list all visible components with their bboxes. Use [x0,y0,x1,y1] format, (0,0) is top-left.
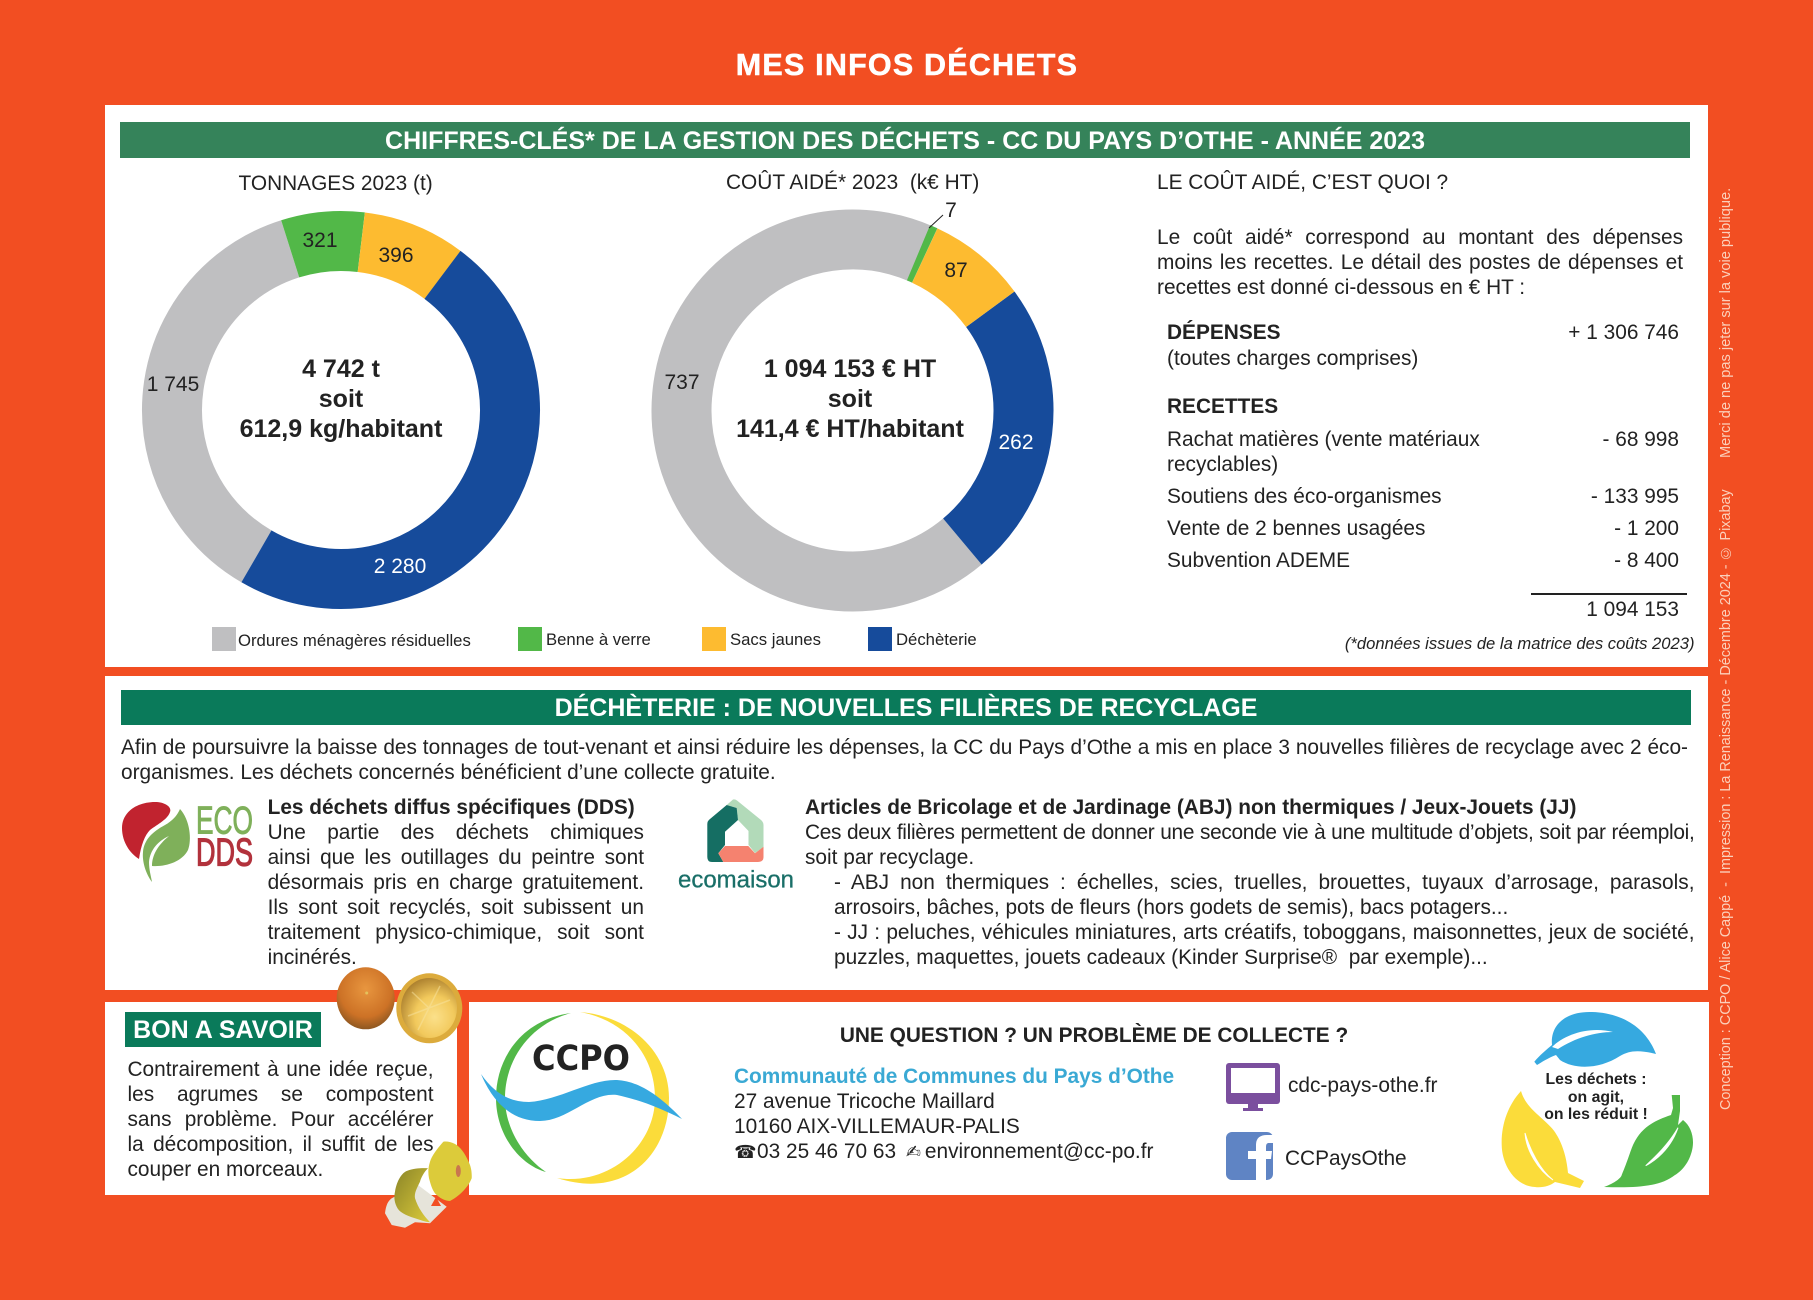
text: coordonnées: Communauté de Communes du Pays d’Othe [734,1065,1174,1088]
text: les déchets on agit: on les réduit ! [1544,1106,1648,1123]
chart title: tonnages: TONNAGES 2023 (t) [238,172,433,195]
text: explication du coût aidé: Le coût aidé* correspond au montant des dépenses [1157,226,1683,248]
donut center text: coût aidé: 141,4 € HT/habitant [736,415,964,443]
heading: déchèterie [121,690,1691,725]
icon: ordinateur [1226,1063,1280,1111]
text: site web: cdc-pays-othe.fr [1288,1074,1437,1096]
panel: contact [469,1002,1709,1195]
text: les déchets on agit [1544,1071,1648,1123]
donut chart: tonnages: 1 745 [147,373,199,396]
text: déchets diffus spécifiques: Une partie des déchets chimiques [268,820,644,844]
text: déchets diffus spécifiques: ainsi que les outillages du peintre sont [268,846,644,868]
text: explication du coût aidé: moins les recettes. Le détail des postes de dépenses et [1157,250,1683,274]
icon: facebook [1226,1132,1273,1180]
legend item: déchèterie: Déchèterie [896,630,977,649]
text: coordonnées: ☎ [734,1142,757,1163]
text: introduction: organismes. Les déchets concernés bénéficient d’une collecte gratuite. [121,760,776,784]
text: articles de bricolage et jeux-jouets: - ABJ non thermiques : échelles, scies, truelles, brouettes, tuyaux d’arrosage, parasols, [834,871,1694,894]
side credits: conception: Conception : CCPO / Alice Cappé - Impression : La Renaissance - Décembre 2024 - © Pixabay [1718,489,1734,1110]
logo: ecomaison [678,799,794,894]
text: agrumes: Contrairement à une idée reçue, [128,1058,434,1081]
text: agrumes: couper en morceaux. [128,1158,323,1181]
donut chart: coût aidé: 87 [944,259,968,282]
heading: question: UNE QUESTION ? UN PROBLÈME DE COLLECTE ? [840,1024,1348,1047]
logo: CCPO: CCPO [532,1039,630,1079]
footnote: (*données issues de la matrice des coûts 2023) [1345,634,1694,653]
panel: chiffres-clés [105,105,1708,667]
text: articles de bricolage et jeux-jouets: soit par recyclage. [805,846,974,869]
donut chart: tonnages: 2 280 [374,555,426,578]
legend item: ordures ménagères résiduelles: Ordures ménagères résiduelles [238,631,471,650]
logo: ecoDDS: ECO [196,799,253,842]
legend item: benne à verre: Benne à verre [546,630,651,649]
logo: ecomaison: ecomaison [678,866,794,894]
text: explication du coût aidé: recettes est donné ci-dessous en € HT : [1157,276,1525,298]
table: dépenses et recettes: Rachat matières (vente matériaux [1167,428,1480,450]
text: agrumes [128,1058,434,1181]
text: explication du coût aidé [1157,226,1683,298]
heading: déchèterie: DÉCHÈTERIE : DE NOUVELLES FILIÈRES DE RECYCLAGE [555,694,1257,722]
table: dépenses et recettes: - 68 998 [1602,428,1679,450]
text: les déchets on agit: on agit, [1568,1088,1624,1106]
text: articles de bricolage et jeux-jouets: arrosoirs, bâches, pots de fleurs (hors godets de semis), bacs potagers... [834,896,1508,919]
legend [212,627,977,651]
text: articles de bricolage et jeux-jouets: Ces deux filières permettent de donner une seconde vie à une multitude d’objets, soit par réemploi, [805,821,1694,844]
donut chart: tonnages [142,211,540,609]
panel: déchèterie [105,676,1708,990]
heading: chiffres-clés [120,122,1690,158]
icon: feuilles recyclage [1502,1012,1693,1188]
table: dépenses et recettes: - 8 400 [1614,548,1679,572]
donut center text: coût aidé [736,355,964,443]
text: articles de bricolage et jeux-jouets: puzzles, maquettes, jouets cadeaux (Kinder Surprise® par exemple)... [834,946,1488,969]
text: déchets diffus spécifiques: traitement physico-chimique, soit sont [268,920,644,944]
table: dépenses et recettes: Soutiens des éco-organismes [1167,484,1442,508]
text: articles de bricolage et jeux-jouets: Articles de Bricolage et de Jardinage (ABJ) non thermiques / Jeux-Jouets (JJ) [805,796,1576,819]
table: dépenses et recettes: Subvention ADEME [1167,548,1350,572]
illustration: zeste de citron [385,1142,472,1228]
panel: bon à savoir [105,1002,457,1195]
donut chart: coût aidé: 737 [664,371,700,394]
text: articles de bricolage et jeux-jouets: - JJ : peluches, véhicules miniatures, arts créatifs, toboggans, maisonnettes, jeux de société, [834,921,1694,944]
text: coordonnées: 03 25 46 70 63 environnement@cc-po.fr [757,1140,1153,1163]
logo: ecoDDS [122,799,253,882]
donut center text: coût aidé: soit [828,385,872,413]
text: coordonnées: ✍ [906,1142,921,1163]
text: déchets diffus spécifiques: Les déchets diffus spécifiques (DDS) [268,796,635,818]
table: dépenses et recettes: 1 094 153 [1586,598,1679,620]
legend item: sacs jaunes [702,627,821,651]
donut chart: coût aidé: 7 [945,199,957,222]
donut chart: tonnages: 321 [302,229,338,252]
text: articles de bricolage et jeux-jouets [805,796,1694,969]
text: coordonnées [734,1065,1174,1163]
chart title: coût aidé: COÛT AIDÉ* 2023 (k€ HT) [726,171,979,194]
text: les déchets on agit: Les déchets : [1546,1071,1646,1088]
text: agrumes: sans problème. Pour accélérer [128,1108,434,1131]
donut center text: tonnages: 612,9 kg/habitant [240,415,442,443]
legend item: benne à verre [518,627,651,651]
text: coordonnées: 10160 AIX-VILLEMAUR-PALIS [734,1115,1020,1138]
illustration: oranges [336,967,462,1044]
text: déchets diffus spécifiques [268,796,644,968]
text: déchets diffus spécifiques: désormais pris en charge gratuitement. [268,870,644,894]
heading: bon à savoir: BON A SAVOIR [133,1016,313,1044]
legend item: déchèterie [868,627,977,651]
text: coordonnées: 27 avenue Tricoche Maillard [734,1090,995,1113]
donut chart: coût aidé: 262 [998,431,1034,454]
text: facebook: CCPaysOthe [1285,1146,1407,1170]
heading: le coût aidé: LE COÛT AIDÉ, C’EST QUOI ? [1157,171,1448,194]
text: déchets diffus spécifiques: incinérés. [268,946,357,968]
heading: chiffres-clés: CHIFFRES-CLÉS* DE LA GESTION DES DÉCHETS - CC DU PAYS D’OTHE - ANNÉE 2023 [385,127,1425,155]
text: introduction [121,736,1688,784]
table: dépenses et recettes: RECETTES [1167,394,1278,418]
table: dépenses et recettes: recyclables) [1167,452,1278,476]
donut center text: tonnages: soit [319,385,363,413]
text: agrumes: les agrumes se compostent [128,1083,434,1106]
logo: ecoDDS: DDS [196,832,253,875]
donut chart: tonnages: 396 [378,244,414,267]
logo: CCPO [481,1012,682,1184]
text: agrumes: la décomposition, il suffit de les [128,1133,434,1156]
main title: MES INFOS DÉCHETS [736,48,1078,82]
table: dépenses et recettes: - 133 995 [1591,484,1679,508]
donut center text: tonnages: 4 742 t [302,355,380,383]
donut center text: coût aidé: 1 094 153 € HT [764,355,936,383]
donut center text: tonnages [240,355,442,443]
table: dépenses et recettes: - 1 200 [1614,516,1679,540]
table: dépenses et recettes: + 1 306 746 [1568,320,1679,344]
table: dépenses et recettes: Vente de 2 bennes usagées [1167,516,1425,540]
table: dépenses et recettes: DÉPENSES [1167,320,1281,344]
table: dépenses et recettes: (toutes charges comprises) [1167,346,1418,370]
text: introduction: Afin de poursuivre la baisse des tonnages de tout-venant et ainsi réduire les dépenses, la CC du Pays d’Othe a mis en place 3 nouvelles filières de recyclage avec 2 éco- [121,736,1688,758]
legend item: sacs jaunes: Sacs jaunes [730,630,821,649]
donut chart: coût aidé [652,199,1054,612]
text: déchets diffus spécifiques: Ils sont soit recyclés, soit subissent un [268,896,644,918]
side note: voie publique: Merci de ne pas jeter sur la voie publique. [1718,188,1734,458]
table: dépenses et recettes [1167,320,1687,620]
